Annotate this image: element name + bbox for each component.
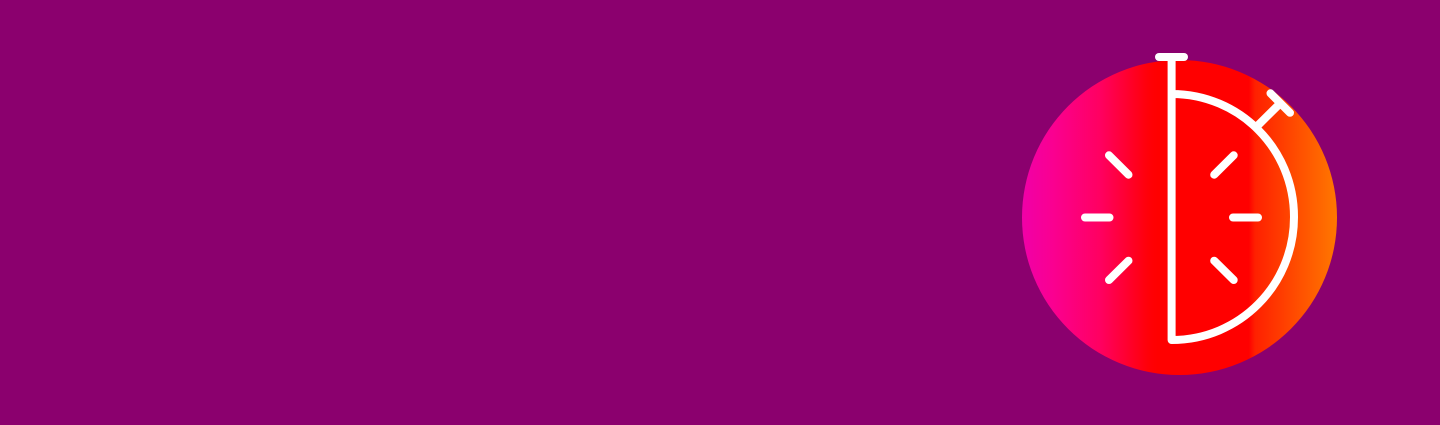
icon: gradient circle bbox=[1022, 60, 1337, 375]
icon: stopwatch bbox=[1085, 57, 1294, 340]
tick marks bbox=[1085, 155, 1258, 280]
stopwatch half body bbox=[1172, 57, 1294, 340]
top button bbox=[1159, 53, 1184, 61]
side button bbox=[1258, 93, 1290, 125]
